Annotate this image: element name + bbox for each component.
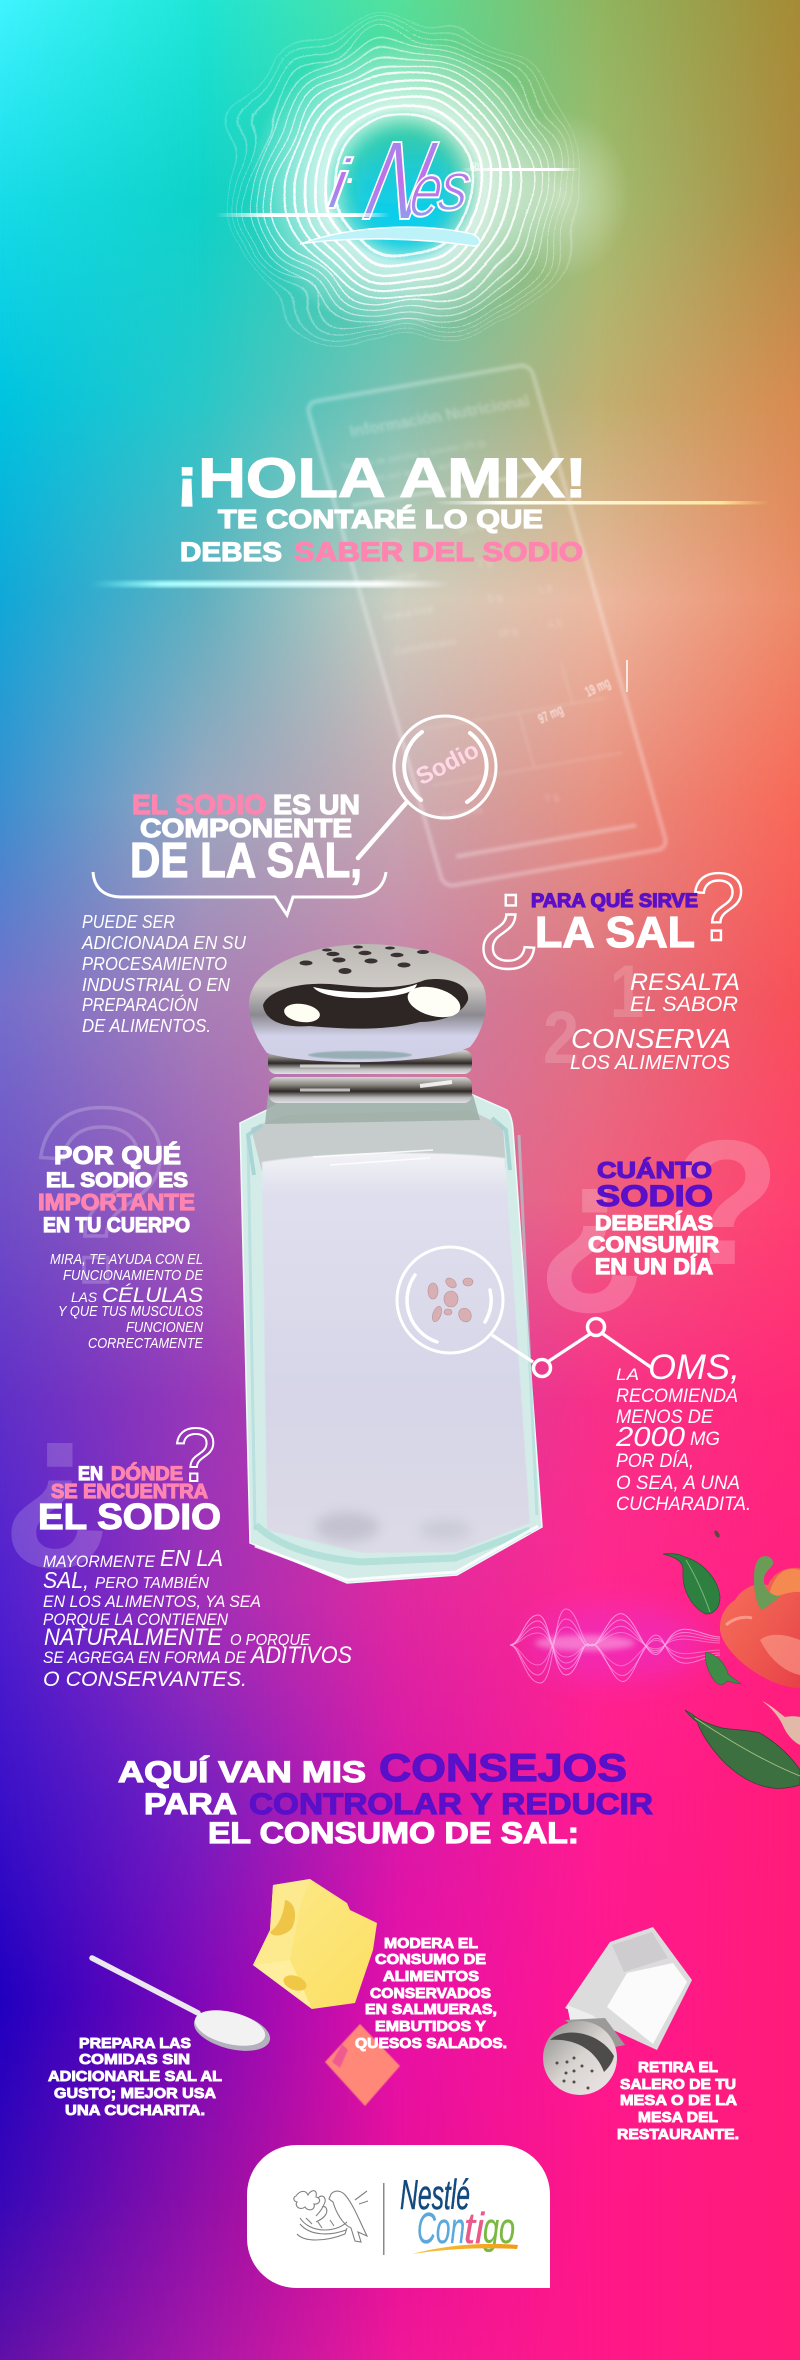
text: la oms recomienda: MENOS DE [616, 1407, 713, 1428]
logo: i-Nes with wavy rings [224, 19, 630, 351]
heading: el sodio es un componente de la sal: COMPONENTE [140, 813, 352, 843]
nutrition label: Grasa total [382, 604, 434, 623]
title: ¡HOLA AMIX! [176, 446, 587, 509]
label value: 19 mg: 19 mg [582, 674, 613, 701]
heading: consejos: EL CONSUMO DE SAL: [208, 1817, 579, 1850]
heading: por que el sodio es importante: EN TU CUERPO [43, 1214, 190, 1237]
icon: nest and birds [294, 2191, 368, 2242]
tip 2: CONSUMO DE [375, 1951, 486, 1968]
heading: en donde se encuentra el sodio: ? [174, 1413, 216, 1498]
text: la oms recomienda: RECOMIENDA [616, 1386, 738, 1407]
heading: por que el sodio es importante [38, 1141, 195, 1237]
nutrition label: 2 g [477, 557, 494, 570]
text: la oms recomienda: O SEA, A UNA [616, 1473, 740, 1494]
tip 3: MESA O DE LA [620, 2092, 737, 2109]
text: mayormente en la sal [43, 1545, 352, 1691]
cap holes [556, 2056, 594, 2090]
heading: para que sirve la sal [480, 854, 745, 990]
speech bracket [93, 872, 386, 915]
tip 2: EN SALMUERAS, [365, 2001, 497, 2018]
small leaf [705, 1652, 741, 1685]
list: usos de la sal: CONSERVA [571, 1023, 731, 1054]
vegetables: pepper and leaves [663, 1530, 800, 1788]
nutrition label: 120 [517, 513, 537, 526]
nutrition label: Azúcares [439, 805, 484, 823]
orange swoosh [412, 2244, 518, 2254]
nutrition label: 7 g [543, 792, 561, 805]
ghost question marks right [537, 1103, 780, 1350]
nutrition label: 500 kJ [457, 521, 489, 537]
tip 3: RETIRA EL [638, 2059, 718, 2076]
logo card: Nestle Contigo [247, 2145, 550, 2288]
tip 3: SALERO DE TU [620, 2076, 736, 2093]
list: usos de la sal: 1 [610, 950, 644, 1033]
ghost question marks right: ? [537, 1151, 645, 1350]
spoon with salt [92, 1958, 274, 2058]
title [176, 446, 587, 567]
salt fill [262, 1153, 530, 1553]
text: mira te ayuda: FUNCIONAMIENTO DE [63, 1267, 204, 1284]
heading: cuanto sodio: EN UN DÍA [595, 1254, 713, 1279]
heading: cuanto sodio: CUÁNTO [597, 1156, 712, 1183]
heading: el sodio es un componente de la sal: DE LA SAL, [130, 834, 362, 888]
metal cap [249, 944, 486, 1062]
tip 2: ALIMENTOS [383, 1968, 479, 1985]
text: mira te ayuda: CORRECTAMENTE [88, 1335, 204, 1352]
heading: en donde se encuentra el sodio: DÓNDE [111, 1463, 183, 1485]
seed [713, 1530, 721, 1538]
heading: consejos: CONSEJOS [379, 1747, 627, 1790]
text: puede ser adicionada: PROCESAMIENTO [82, 954, 227, 974]
nutrition label: Proteínas [373, 570, 418, 588]
shaker small [543, 1927, 692, 2095]
heading: cuanto sodio [588, 1156, 719, 1279]
tip 2 [355, 1935, 507, 2052]
text: la oms recomienda [615, 1348, 751, 1515]
text: la oms recomienda: OMS, [648, 1348, 740, 1387]
heading: consejos [118, 1747, 653, 1850]
heading: en donde se encuentra el sodio [38, 1413, 221, 1537]
shaker holes [300, 946, 429, 974]
nutrition label: Tamaño de porción: 1 porción (25 g) [340, 437, 487, 472]
text: mira te ayuda: MIRA, TE AYUDA CON EL [50, 1251, 203, 1268]
brand: Contigo: ti [464, 2204, 485, 2253]
heading: por que el sodio es importante: POR QUÉ [54, 1141, 181, 1170]
brand name: s [433, 146, 477, 225]
ghost question mark lower left: ? [1, 1404, 111, 1605]
text: mayormente en la sal: MAYORMENTE [43, 1552, 156, 1571]
metal cap [543, 2021, 617, 2095]
text: puede ser adicionada: PREPARACIÓN [82, 994, 199, 1015]
nutrition label [306, 364, 668, 887]
heading: consejos: PARA [144, 1788, 237, 1821]
list: usos de la sal: RESALTA [630, 969, 740, 996]
tip 3 [617, 2059, 739, 2143]
tip 3: MESA DEL [638, 2109, 718, 2126]
brand name: i [324, 144, 356, 223]
text: mira te ayuda [50, 1251, 204, 1352]
heading: para que sirve la sal: PARA QUÉ SIRVE [531, 890, 698, 912]
tip 1: GUSTO; MEJOR USA [54, 2085, 216, 2102]
ghost question marks right: ? [672, 1103, 780, 1302]
heading: en donde se encuentra el sodio: EL SODIO [38, 1496, 221, 1537]
nutrition label: Información Nutricional [348, 392, 532, 441]
threads [565, 2018, 625, 2050]
pepper stem [754, 1556, 780, 1610]
tip 2: QUESOS SALADOS. [355, 2035, 507, 2052]
flare lines upper [215, 168, 580, 217]
nutrition label: 1,3 [536, 583, 554, 596]
brand name: N [354, 119, 446, 244]
heading: consejos: CONTROLAR Y REDUCIR [249, 1788, 653, 1821]
brand name: e [404, 149, 450, 233]
text: mayormente en la sal: SE AGREGA EN FORMA DE [43, 1648, 247, 1667]
text: mayormente en la sal: EN LA [160, 1545, 223, 1571]
nutrition label: 5 g [486, 592, 504, 605]
text: mayormente en la sal: NATURALMENTE [44, 1624, 223, 1651]
list: usos de la sal: EL SABOR [630, 993, 738, 1016]
text: puede ser adicionada: PUEDE SER [82, 912, 175, 932]
tip 2: EMBUTIDOS Y [375, 2018, 486, 2035]
text: mira te ayuda: FUNCIONEN [126, 1319, 203, 1336]
text: la oms recomienda: 2000 [615, 1421, 685, 1452]
brand: Contigo: go [483, 2204, 515, 2253]
list: usos de la sal: LOS ALIMENTOS [570, 1052, 731, 1074]
heading: cuanto sodio: SODIO [596, 1180, 713, 1213]
tip 2: CONSERVADOS [370, 1985, 491, 2002]
heading: para que sirve la sal: LA SAL [535, 908, 695, 957]
bay leaf [685, 1710, 800, 1788]
word in lens: Sodio: Sodio [412, 736, 483, 791]
text: mayormente en la sal: PERO TAMBIÉN [95, 1573, 209, 1592]
text: la oms recomienda: CUCHARADITA. [616, 1494, 751, 1515]
divider [383, 2183, 384, 2255]
text: mira te ayuda: Y QUE TUS MUSCULOS [58, 1303, 203, 1320]
sound wave [510, 1607, 720, 1683]
tip 1: COMIDAS SIN [79, 2051, 190, 2068]
spinach leaf [663, 1554, 720, 1614]
cheese shadow [325, 2024, 400, 2106]
heading: en donde se encuentra el sodio: EN [78, 1464, 103, 1485]
text: mayormente en la sal: ADITIVOS [249, 1642, 352, 1669]
brand: Nestle: Nestlé [400, 2171, 470, 2218]
heading: cuanto sodio: CONSUMIR [588, 1232, 719, 1257]
cheese [253, 1879, 377, 2009]
threaded neck [265, 1095, 480, 1124]
tip 1: ADICIONARLE SAL AL [48, 2068, 222, 2085]
heading: cuanto sodio: DEBERÍAS [595, 1212, 713, 1235]
list: usos de la sal [543, 950, 740, 1079]
text: mayormente en la sal: EN LOS ALIMENTOS, YA SEA [43, 1592, 261, 1611]
tip 1: PREPARA LAS [79, 2035, 191, 2052]
nutrition label: 18 g [496, 626, 519, 640]
nutrition label: Porciones por envase: aprox. 8 [344, 457, 471, 488]
text: mira te ayuda: CÉLULAS [102, 1284, 203, 1307]
garlic [762, 1701, 800, 1745]
label value: 97 mg: 97 mg [535, 701, 566, 728]
text: la oms recomienda: LA [616, 1365, 639, 1384]
nutrition label: 0,5 [527, 548, 544, 561]
logo swoosh [300, 227, 480, 246]
ghost question marks left: ? [30, 1056, 170, 1335]
heading: el sodio es un componente de la sal [130, 789, 362, 888]
glass body [240, 1095, 542, 1583]
text: mayormente en la sal: O PORQUE [230, 1632, 310, 1649]
title: TE CONTARÉ LO QUE [218, 504, 543, 534]
title: DEBES [180, 537, 282, 567]
nutrition label: Energía [363, 536, 401, 553]
heading: por que el sodio es importante: EL SODIO ES [46, 1169, 188, 1192]
heading: por que el sodio es importante: IMPORTANTE [38, 1189, 195, 1215]
text: mayormente en la sal: O CONSERVANTES. [43, 1668, 247, 1691]
salt shaker [240, 944, 542, 1583]
text: mayormente en la sal: SAL, [43, 1567, 89, 1593]
text: puede ser adicionada: DE ALIMENTOS. [82, 1016, 211, 1036]
title: SABER DEL SODIO [294, 537, 583, 567]
tip 1 [48, 2035, 222, 2119]
brand name: · [344, 160, 355, 198]
flare lines title [90, 501, 770, 587]
tip 3: RESTAURANTE. [617, 2126, 739, 2143]
text: mayormente en la sal: PORQUE LA CONTIENEN [43, 1610, 229, 1629]
nutrition label: Carbohidratos [392, 637, 458, 658]
heading: en donde se encuentra el sodio: SE ENCUENTRA [51, 1481, 208, 1503]
heading: para que sirve la sal: ? [691, 854, 745, 961]
nutrition label: 4,5 [546, 618, 564, 631]
text: mira te ayuda: LAS [71, 1289, 98, 1305]
text: la oms recomienda: MG [690, 1429, 720, 1450]
heading: consejos: AQUÍ VAN MIS [118, 1755, 366, 1789]
heading: el sodio es un componente de la sal: ES UN [273, 789, 360, 820]
red pepper [720, 1568, 800, 1688]
magnifier over Sodio [358, 716, 496, 858]
text: puede ser adicionada [81, 912, 247, 1036]
tip 2: MODERA EL [384, 1935, 478, 1952]
registered mark: ® [470, 160, 479, 174]
heading: para que sirve la sal: ? [480, 872, 538, 990]
list: usos de la sal: 2 [543, 996, 579, 1079]
salt crystals [428, 1276, 474, 1324]
brand: Contigo: Con [417, 2204, 465, 2253]
text: puede ser adicionada: INDUSTRIAL O EN [82, 975, 231, 995]
heading: el sodio es un componente de la sal: EL SODIO [132, 789, 266, 820]
magnifier over salt with connector [397, 1247, 652, 1376]
tip 1: UNA CUCHARITA. [65, 2102, 205, 2119]
text: la oms recomienda: POR DÍA, [616, 1451, 694, 1472]
text: puede ser adicionada: ADICIONADA EN SU [81, 933, 247, 953]
